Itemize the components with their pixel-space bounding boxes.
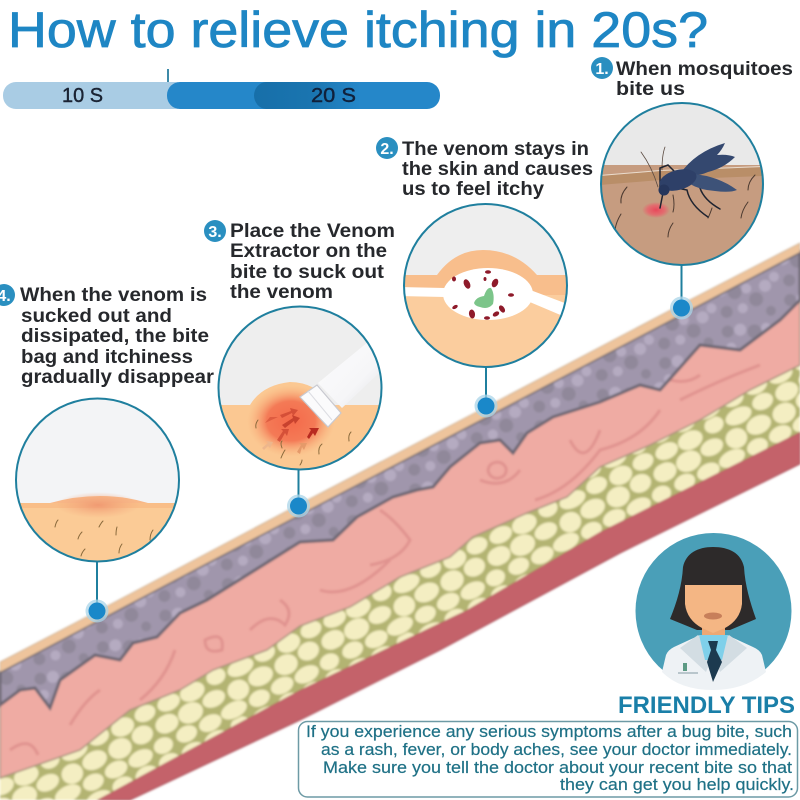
callout: tips box: as a rash, fever, or body aches, see your doctor immediately. bbox=[321, 740, 792, 759]
text: step 3: Place the Venom bbox=[230, 221, 395, 242]
text: step 3: bite to suck out bbox=[230, 262, 385, 283]
text: step 4: sucked out and bbox=[21, 306, 172, 327]
icon: doctor bbox=[636, 533, 792, 690]
skin surface bbox=[0, 243, 800, 672]
badge 1: 1. bbox=[595, 61, 609, 78]
skin cross-section bbox=[0, 243, 800, 800]
text: step 4: bag and itchiness bbox=[21, 347, 193, 368]
connector line and dot bbox=[474, 367, 498, 418]
step 4 bbox=[0, 284, 215, 622]
label: 20 S: 20 S bbox=[311, 85, 356, 107]
circle: mosquito biting bbox=[600, 103, 765, 267]
circle: venom in skin bbox=[400, 204, 570, 370]
hair bbox=[670, 547, 756, 630]
text: step 3: the venom bbox=[230, 282, 333, 303]
step 1 bbox=[591, 57, 793, 320]
badge 3: 3. bbox=[208, 224, 222, 241]
text: step 4: When the venom is bbox=[20, 285, 207, 306]
label: 10 S: 10 S bbox=[62, 85, 103, 107]
text: step 3: Extractor on the bbox=[230, 241, 387, 262]
connector line and dot bbox=[670, 264, 693, 320]
dermis layer bbox=[0, 300, 800, 778]
text: step 1: bite us bbox=[616, 79, 685, 100]
circle: venom extractor bbox=[218, 306, 382, 470]
lips bbox=[704, 612, 722, 620]
text: step 2: the skin and causes bbox=[402, 159, 593, 180]
face bbox=[685, 585, 742, 633]
badge 4 bbox=[0, 284, 15, 306]
tie bbox=[707, 641, 722, 682]
text: step 4: gradually disappear bbox=[21, 367, 215, 388]
connector line and dot bbox=[86, 562, 108, 622]
dermis detail bbox=[10, 365, 760, 755]
timeline bar bbox=[3, 69, 440, 109]
fat layer bbox=[0, 365, 800, 800]
badge 2: 2. bbox=[380, 141, 394, 158]
circle: bite fading bbox=[15, 398, 180, 563]
text: step 2 bbox=[402, 139, 593, 200]
text: step 4 bbox=[20, 285, 215, 388]
shirt bbox=[699, 635, 728, 660]
callout: tips box: If you experience any serious symptoms after a bug bite, such bbox=[306, 722, 792, 741]
callout: tips box: they can get you help quickly. bbox=[560, 775, 794, 794]
callout: tips box: Make sure you tell the doctor about your recent bite so that bbox=[323, 758, 792, 777]
lapels bbox=[680, 635, 747, 672]
pocket bbox=[678, 672, 698, 674]
badge 3 bbox=[204, 220, 226, 242]
title: How to relieve itching in 20s? bbox=[8, 2, 708, 58]
epidermis layer bbox=[0, 252, 800, 708]
text: step 4: dissipated, the bite bbox=[21, 326, 209, 347]
badge 1 bbox=[591, 57, 613, 79]
muscle layer bbox=[97, 432, 800, 800]
neck bbox=[702, 628, 725, 635]
connector line and dot bbox=[287, 469, 310, 518]
text: step 2: The venom stays in bbox=[402, 139, 589, 160]
text: step 2: us to feel itchy bbox=[402, 179, 544, 200]
badge 2 bbox=[376, 137, 398, 159]
callout: tips box bbox=[298, 722, 798, 797]
heading: friendly tips: FRIENDLY TIPS bbox=[618, 692, 795, 719]
step 2 bbox=[376, 137, 593, 418]
coat overflow bbox=[662, 635, 766, 690]
text: step 1: When mosquitoes bbox=[616, 59, 793, 80]
text: step 1 bbox=[616, 59, 793, 100]
step 3 bbox=[204, 220, 395, 518]
text: step 3 bbox=[230, 221, 395, 303]
